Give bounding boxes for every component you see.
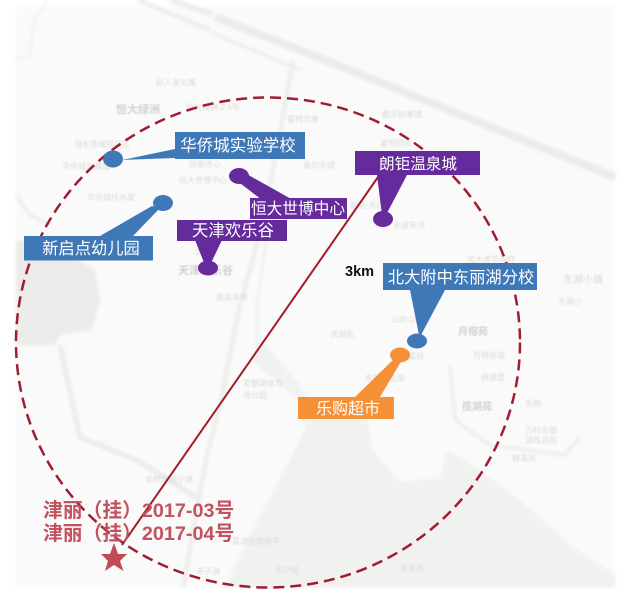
marker: 北大附中东丽湖分校 bbox=[383, 263, 537, 348]
base map: 东湖小镇 bbox=[563, 273, 603, 286]
base map: 安都湖体育 bbox=[243, 378, 283, 388]
base map: 东户苑 bbox=[275, 565, 299, 575]
base map: 天津欢乐谷 bbox=[178, 263, 233, 277]
marker: 北大附中东丽湖分校: 北大附中东丽湖分校 bbox=[388, 269, 534, 287]
base map: 东丽湖北岸 bbox=[365, 373, 405, 383]
base map: 月榕苑 bbox=[458, 325, 488, 338]
base map: 海东秀域居民区 bbox=[74, 139, 130, 149]
base map: 好人家公寓 bbox=[156, 77, 196, 87]
marker: 天津欢乐谷 bbox=[177, 220, 287, 276]
marker: 朗钜温泉城 bbox=[355, 151, 480, 227]
base map: 耕溪苑 bbox=[512, 453, 536, 463]
marker: 恒大世博中心 bbox=[229, 168, 347, 219]
base map: 东湖小 bbox=[558, 296, 582, 306]
base map: 富恒园苑 bbox=[380, 138, 412, 148]
marker: 华侨城实验学校 bbox=[103, 132, 305, 168]
base map: 华侨城托水家 bbox=[87, 192, 135, 202]
radius line bbox=[122, 167, 385, 545]
base map: 恒大绿洲 bbox=[116, 102, 160, 116]
distance label: 3km: 3km bbox=[345, 264, 374, 280]
base map: 旗岚丰帝 bbox=[216, 292, 248, 302]
base map: 东永苑 bbox=[400, 563, 424, 573]
3km radius circle bbox=[16, 98, 520, 588]
base map: 嘉湖自然苑子 bbox=[232, 536, 280, 546]
base map: 都乐绘事馆 bbox=[382, 109, 422, 119]
plot labels: 津丽（挂）2017-04号 bbox=[43, 523, 234, 545]
base map: 场公园 bbox=[243, 391, 267, 400]
base map: 示韵嘉苑 bbox=[392, 351, 424, 361]
plot labels: 津丽（挂）2017-03号 bbox=[43, 500, 234, 522]
marker: 新启点幼儿园: 新启点幼儿园 bbox=[42, 240, 140, 258]
base map: 揽湖苑 bbox=[462, 400, 492, 413]
icon: star site marker bbox=[101, 543, 127, 571]
base map: 朗钜·天阔 bbox=[350, 200, 385, 210]
marker: 新启点幼儿园 bbox=[24, 195, 173, 260]
base map: 天津 bbox=[195, 244, 217, 257]
base map: 湖珠湖苑 bbox=[525, 435, 557, 445]
base map: 山岭公园 bbox=[392, 314, 424, 324]
base map: 桃源里 bbox=[481, 372, 505, 382]
base map: 恒大世博中心 bbox=[179, 175, 227, 185]
base map: 蒙特吉维 bbox=[287, 114, 319, 124]
base map: 水语天河 bbox=[393, 220, 425, 230]
base map: 美尔天颂 bbox=[303, 160, 335, 170]
marker: 恒大世博中心: 恒大世博中心 bbox=[251, 200, 345, 218]
base map: 华侨城东森园 bbox=[62, 161, 110, 171]
marker: 华侨城实验学校: 华侨城实验学校 bbox=[180, 136, 296, 155]
base map: 天子湖 bbox=[196, 567, 220, 576]
base map: 恒安市心 bbox=[189, 159, 221, 169]
base map: 万科东丽 bbox=[525, 425, 557, 435]
marker: 乐购超市: 乐购超市 bbox=[316, 400, 380, 418]
base map: 恒大绿洲-2.6号 bbox=[186, 102, 240, 112]
base map: 万榕尚城 bbox=[473, 350, 505, 360]
base map: 金岭金湖小镇 bbox=[145, 474, 193, 484]
marker: 朗钜温泉城: 朗钜温泉城 bbox=[379, 155, 457, 173]
base map: 北大清华国府 bbox=[467, 254, 515, 264]
marker: 乐购超市 bbox=[298, 348, 410, 419]
plot labels bbox=[43, 500, 234, 545]
marker: 天津欢乐谷: 天津欢乐谷 bbox=[192, 222, 274, 240]
base map: 东购 bbox=[525, 398, 541, 408]
base map: 滨湖苑 bbox=[330, 329, 354, 339]
